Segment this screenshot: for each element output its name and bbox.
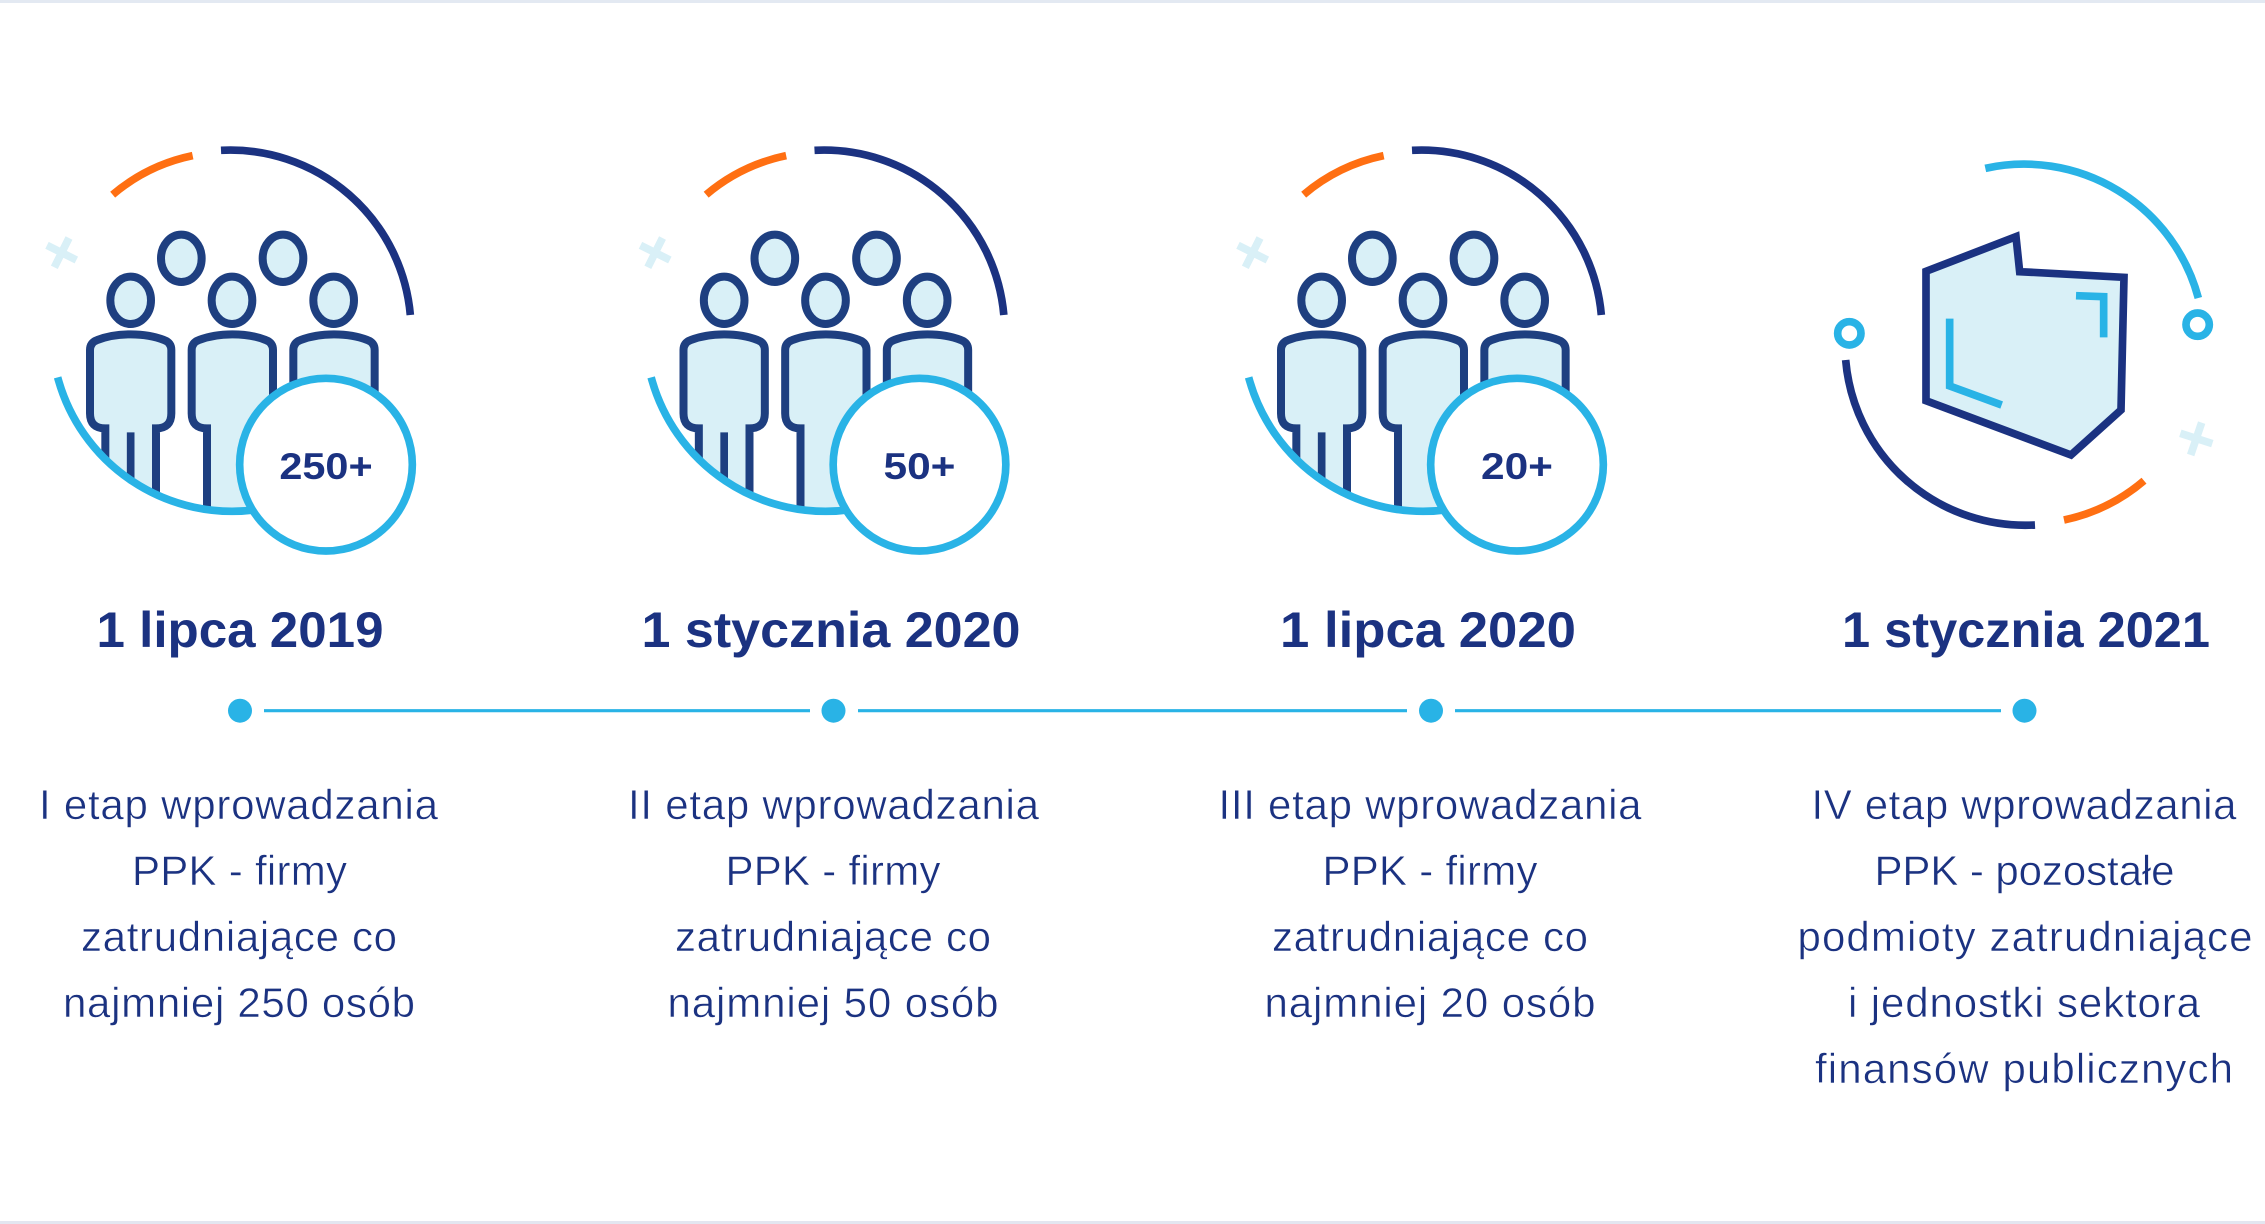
map accent left bbox=[1950, 319, 2002, 405]
text: stage IV: podmioty zatrudniające bbox=[1798, 913, 2252, 960]
plus mark bbox=[47, 238, 76, 267]
map shape bbox=[1926, 237, 2124, 455]
orange arc bbox=[113, 156, 193, 195]
text: stage I: najmniej 250 osób bbox=[63, 979, 415, 1026]
navy arc bbox=[814, 150, 1004, 315]
plus mark bbox=[640, 238, 670, 267]
icon: group of people 20+ bbox=[1238, 150, 1603, 551]
blue arc bbox=[1985, 164, 2198, 298]
text: stage III: najmniej 20 osób bbox=[1264, 979, 1596, 1026]
text: stage IV: IV etap wprowadzania bbox=[1812, 781, 2237, 828]
blue arc bbox=[651, 377, 850, 511]
badge: 50+: 50+ bbox=[883, 446, 955, 487]
navy arc bbox=[221, 150, 410, 315]
plus mark bbox=[2180, 423, 2212, 455]
text: stage I: PPK - firmy bbox=[132, 847, 347, 894]
ring left bbox=[1838, 322, 1861, 345]
text: stage III: zatrudniające co bbox=[1272, 913, 1588, 960]
date: 1 stycznia 2021: 1 stycznia 2021 bbox=[1842, 602, 2210, 658]
date: 1 stycznia 2020: 1 stycznia 2020 bbox=[642, 602, 1020, 658]
navy arc bbox=[1412, 150, 1601, 315]
text: stage III: PPK - firmy bbox=[1322, 847, 1538, 894]
text: stage IV bbox=[1798, 781, 2252, 1092]
text: stage II: II etap wprowadzania bbox=[628, 781, 1040, 828]
icon: group of people 50+ bbox=[640, 150, 1006, 551]
text: stage I bbox=[39, 781, 439, 1026]
badge: 50+ bbox=[833, 378, 1006, 551]
date: 1 lipca 2020: 1 lipca 2020 bbox=[1280, 602, 1576, 658]
orange arc bbox=[2064, 481, 2144, 520]
text: stage I: zatrudniające co bbox=[81, 913, 397, 960]
badge: 20+ bbox=[1431, 378, 1603, 551]
text: stage II: najmniej 50 osób bbox=[668, 979, 998, 1026]
people bbox=[1281, 235, 1566, 537]
timeline bbox=[228, 699, 2036, 723]
icon: map of Poland bbox=[1838, 164, 2212, 525]
blue arc bbox=[1249, 377, 1448, 511]
text: stage II: PPK - firmy bbox=[726, 847, 940, 894]
text: stage IV: i jednostki sektora bbox=[1848, 979, 2201, 1026]
people bbox=[683, 235, 968, 537]
people bbox=[90, 235, 375, 537]
blue arc bbox=[58, 377, 257, 511]
orange arc bbox=[706, 156, 786, 195]
ring right bbox=[2186, 313, 2209, 336]
text: stage III bbox=[1218, 781, 1642, 1026]
text: stage II: zatrudniające co bbox=[675, 913, 991, 960]
orange arc bbox=[1304, 156, 1384, 195]
text: stage IV: finansów publicznych bbox=[1815, 1045, 2233, 1092]
icon: group of people 250+ bbox=[47, 150, 412, 551]
badge: 20+: 20+ bbox=[1481, 446, 1553, 487]
text: stage II bbox=[628, 781, 1040, 1026]
plus mark bbox=[1238, 238, 1267, 267]
navy arc bbox=[1846, 360, 2035, 525]
text: stage IV: PPK - pozostałe bbox=[1874, 847, 2174, 894]
badge: 250+: 250+ bbox=[279, 446, 373, 487]
date: 1 lipca 2019: 1 lipca 2019 bbox=[96, 602, 384, 658]
text: stage I: I etap wprowadzania bbox=[39, 781, 439, 828]
map accent right bbox=[2076, 296, 2104, 337]
text: stage III: III etap wprowadzania bbox=[1218, 781, 1642, 828]
badge: 250+ bbox=[240, 378, 412, 551]
